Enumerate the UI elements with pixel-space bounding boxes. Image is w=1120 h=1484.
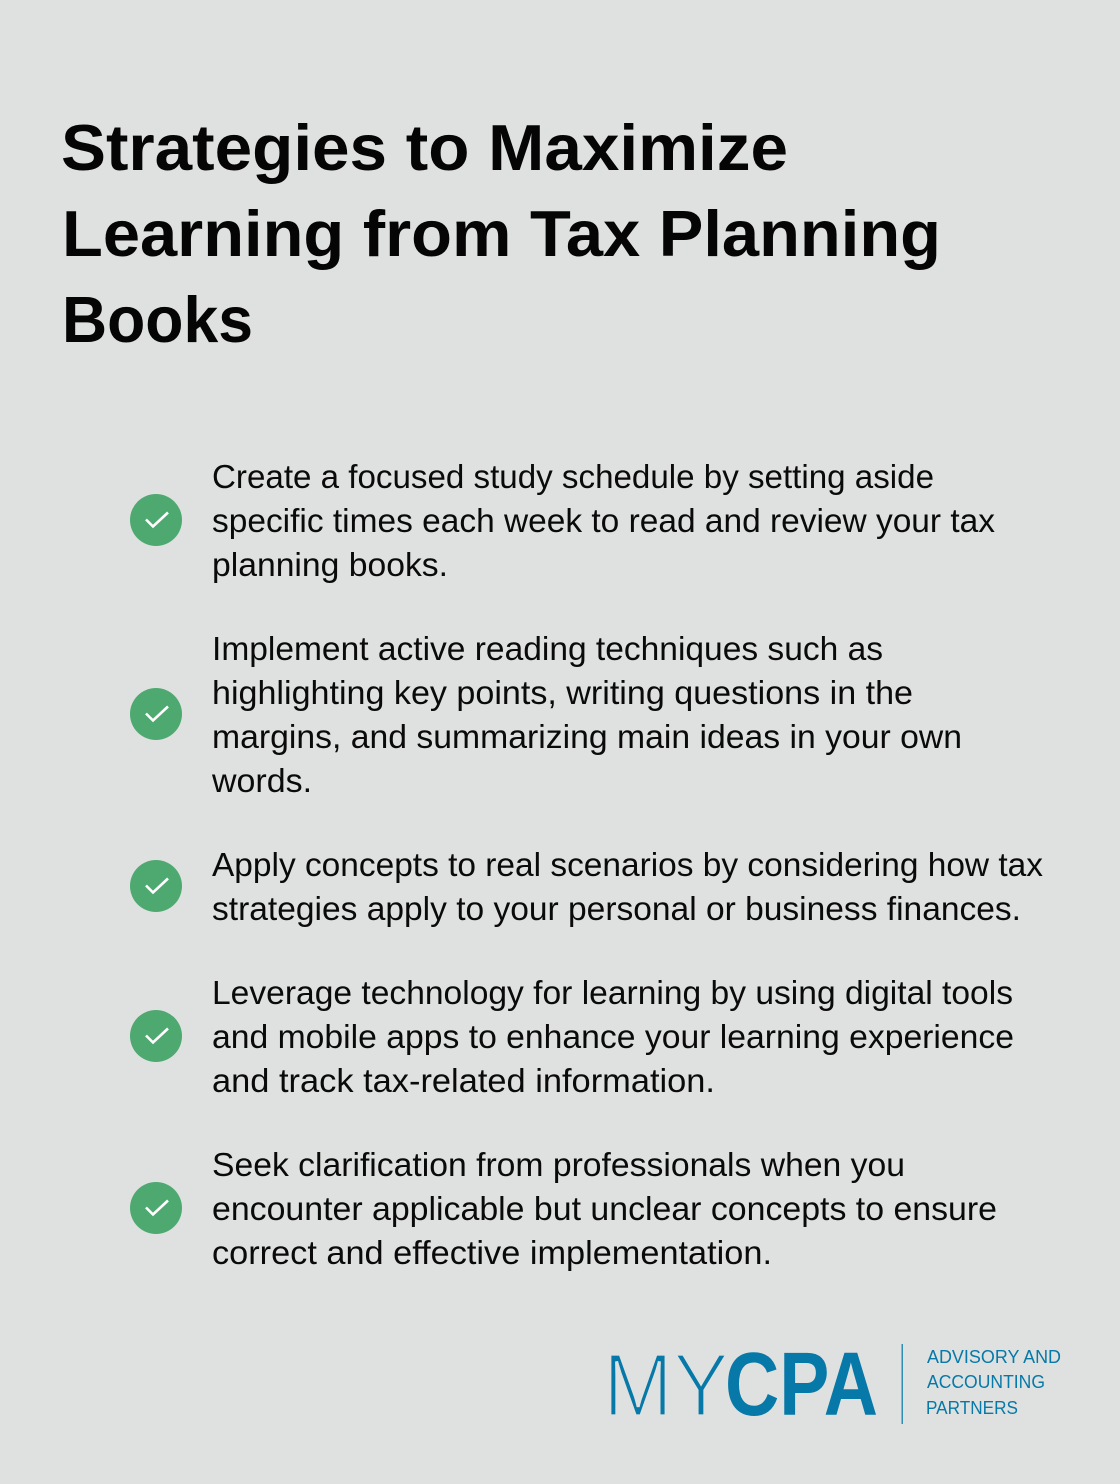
item 1: study schedule — [130, 459, 995, 584]
icon: green check circle — [130, 860, 182, 912]
checklist — [130, 459, 1043, 1272]
logo tagline: ACCOUNTING — [927, 1372, 1045, 1392]
text: active reading: Implement active reading techniques such as — [212, 631, 883, 668]
text: technology: and track tax-related information. — [212, 1063, 715, 1100]
logo divider — [902, 1344, 903, 1424]
icon: green check circle — [130, 494, 182, 546]
item 5: professionals — [130, 1147, 997, 1272]
text: professionals — [212, 1147, 997, 1272]
text: active reading — [211, 631, 962, 800]
text: study schedule — [212, 459, 995, 584]
text: active reading: words. — [211, 763, 312, 800]
text: technology: and mobile apps to enhance your learning experience — [212, 1019, 1014, 1056]
title: Strategies to Maximize — [61, 111, 788, 184]
icon: green check circle — [130, 688, 182, 740]
icon: green check circle — [130, 1010, 182, 1062]
text: real scenarios — [212, 847, 1043, 928]
text: professionals: correct and effective implementation. — [212, 1235, 772, 1272]
item 2: active reading — [130, 631, 962, 800]
text: study schedule: specific times each week to read and review your tax — [212, 503, 995, 540]
item 4: technology — [130, 975, 1014, 1100]
logo: MYCPA — [603, 1335, 1061, 1436]
text: active reading: margins, and summarizing main ideas in your own — [212, 719, 962, 756]
title — [61, 111, 941, 356]
logo wordmark thin MY: MY — [603, 1336, 729, 1436]
text: technology — [212, 975, 1014, 1100]
text: real scenarios: strategies apply to your personal or business finances. — [212, 891, 1021, 928]
text: active reading: highlighting key points, writing questions in the — [212, 675, 913, 712]
logo wordmark bold CPA: CPA — [725, 1335, 878, 1435]
logo tagline: ADVISORY AND — [927, 1347, 1061, 1367]
text: technology: Leverage technology for learning by using digital tools — [212, 975, 1013, 1012]
title: Learning from Tax Planning — [62, 197, 941, 270]
item 3: real scenarios — [130, 847, 1043, 928]
logo tagline — [926, 1347, 1061, 1418]
text: study schedule: Create a focused study schedule by setting aside — [212, 459, 934, 496]
text: professionals: encounter applicable but unclear concepts to ensure — [212, 1191, 997, 1228]
logo tagline: PARTNERS — [926, 1398, 1018, 1418]
text: real scenarios: Apply concepts to real scenarios by considering how tax — [212, 847, 1043, 884]
icon: green check circle — [130, 1182, 182, 1234]
title: Books — [62, 283, 253, 356]
text: study schedule: planning books. — [212, 547, 448, 584]
text: professionals: Seek clarification from professionals when you — [212, 1147, 905, 1184]
